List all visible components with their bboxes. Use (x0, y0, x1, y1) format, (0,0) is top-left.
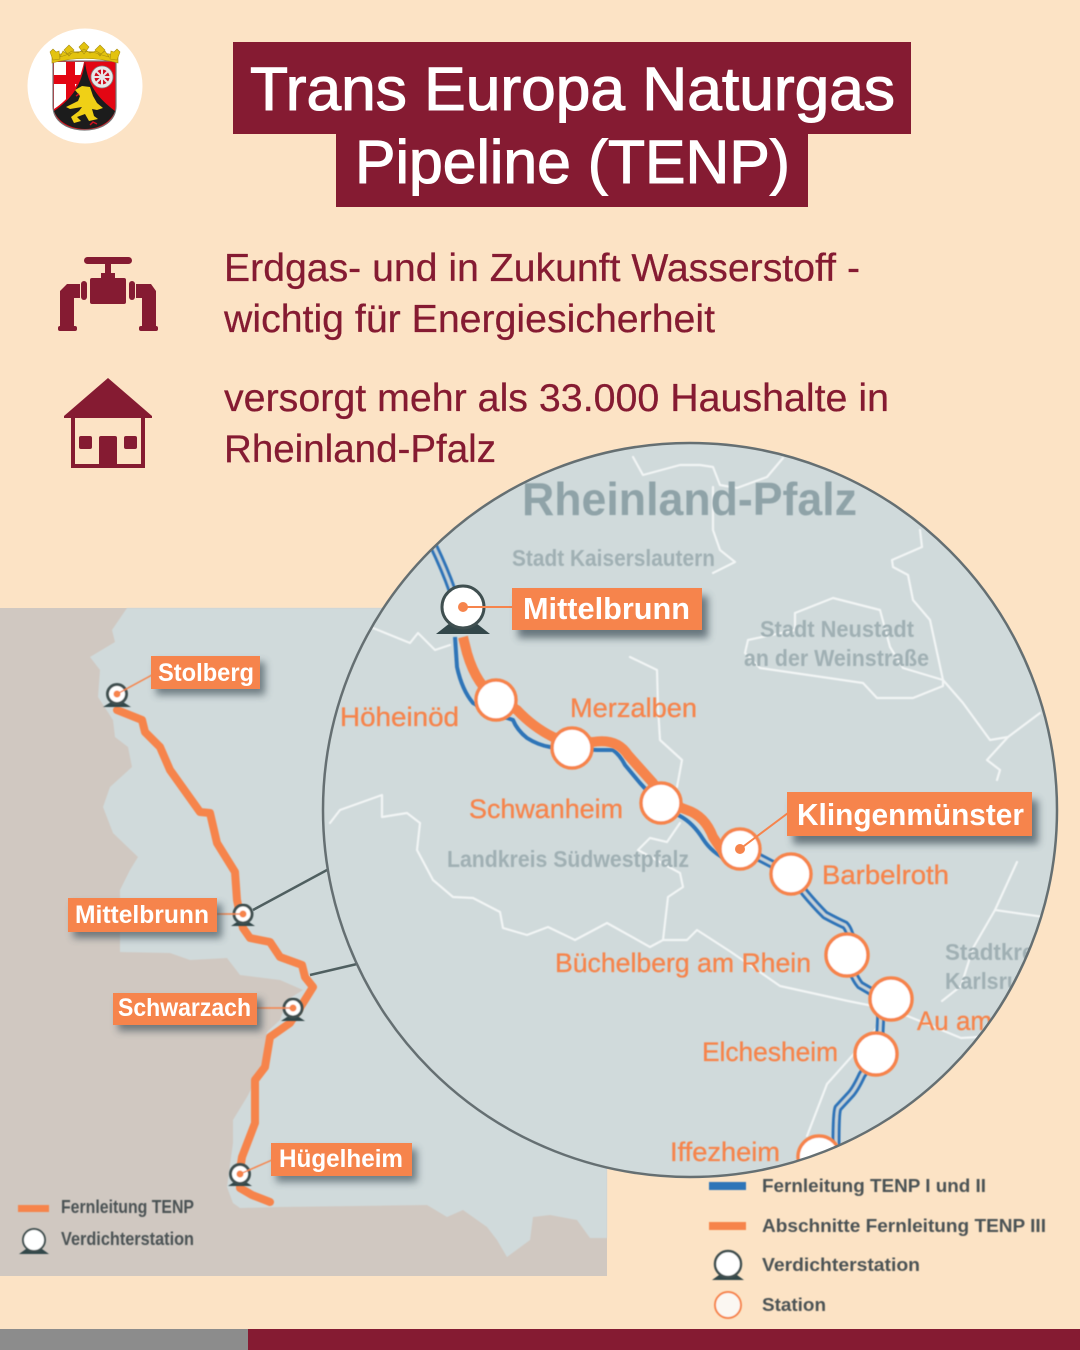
label: Mittelbrunn (68, 898, 222, 938)
stations on pipeline (476, 680, 912, 1178)
label: Stolberg (151, 656, 265, 695)
crest badge (28, 28, 142, 144)
text: energy security: Erdgas- und in Zukunft Wasserstoff - (224, 247, 860, 290)
district names: Stadt Neustadt (760, 616, 914, 642)
district names: Stadt Kaiserslautern (512, 545, 715, 571)
district names: Karlsruhe (945, 968, 1045, 994)
icon: pipe with valve (58, 257, 158, 331)
district names (447, 545, 1053, 994)
legend: circle map: Fernleitung TENP I und II (762, 1176, 986, 1196)
legend: overview map: Fernleitung TENP (61, 1197, 194, 1217)
legend: circle map: Verdichterstation (762, 1255, 920, 1275)
station: Mittelbrunn (217, 905, 255, 926)
station: Mittelbrunn compressor (436, 586, 514, 634)
station names: Büchelberg am Rhein (555, 948, 811, 978)
text: households (224, 377, 889, 471)
legend: circle map: Abschnitte Fernleitung TENP III (762, 1216, 1046, 1236)
text: energy security: wichtig für Energiesicherheit (223, 298, 715, 341)
station names: Iffezheim (670, 1137, 780, 1167)
district names: Landkreis Südwestpfalz (447, 846, 689, 872)
label: Klingenmünster: Klingenmünster (797, 797, 1024, 832)
station names: Au am Rhein (917, 1006, 1067, 1036)
label: Schwarzach: Schwarzach (118, 994, 251, 1022)
pipeline: TENP overview (117, 710, 313, 1202)
pipeline: TENP III sections (463, 637, 725, 855)
text: households: versorgt mehr als 33.000 Haushalte in (224, 377, 889, 420)
district names: Stadtkreis (945, 939, 1053, 965)
pipeline: TENP I and II (433, 545, 891, 1145)
Klingenmünster marker (735, 813, 788, 854)
label: Mittelbrunn large (512, 588, 708, 638)
station names: Schwanheim (469, 794, 623, 824)
land area (90, 608, 607, 1257)
station names: Höheinöd (340, 702, 459, 732)
icon: house (64, 378, 152, 468)
icon: crown (50, 42, 120, 63)
title (233, 42, 911, 207)
label: Klingenmünster (787, 792, 1038, 844)
station names: Merzalben (570, 693, 697, 723)
map heading: Rheinland-Pfalz: Rheinland-Pfalz (522, 473, 857, 525)
text: households: Rheinland-Pfalz (224, 428, 496, 471)
panel: magnified circle map (323, 443, 1075, 1178)
text: energy security (223, 247, 860, 341)
station: Hügelheim (228, 1160, 272, 1186)
legend: circle map (709, 1176, 1046, 1318)
connector lines to magnifier (253, 870, 357, 975)
label: Hügelheim: Hügelheim (279, 1145, 403, 1173)
station names: Barbelroth (822, 860, 949, 890)
title: Pipeline (TENP) (355, 128, 790, 196)
label: Hügelheim (271, 1143, 417, 1182)
label: Stolberg: Stolberg (158, 659, 254, 687)
district names: an der Weinstraße (744, 645, 929, 671)
legend: overview map (18, 1197, 194, 1254)
station names (341, 696, 991, 1162)
station names: Elchesheim (702, 1037, 838, 1067)
panel: overview map (0, 608, 607, 1276)
legend: overview map: Verdichterstation (61, 1229, 194, 1249)
label: Mittelbrunn large: Mittelbrunn (523, 591, 690, 626)
station: Stolberg (103, 675, 152, 707)
legend: circle map: Station (762, 1295, 826, 1315)
icon: shield (53, 61, 116, 130)
station: Schwarzach (257, 999, 305, 1021)
white district borders (330, 457, 1075, 1136)
footer bar (0, 1329, 1080, 1350)
label: Mittelbrunn: Mittelbrunn (75, 901, 209, 929)
title: Trans Europa Naturgas (250, 55, 895, 123)
